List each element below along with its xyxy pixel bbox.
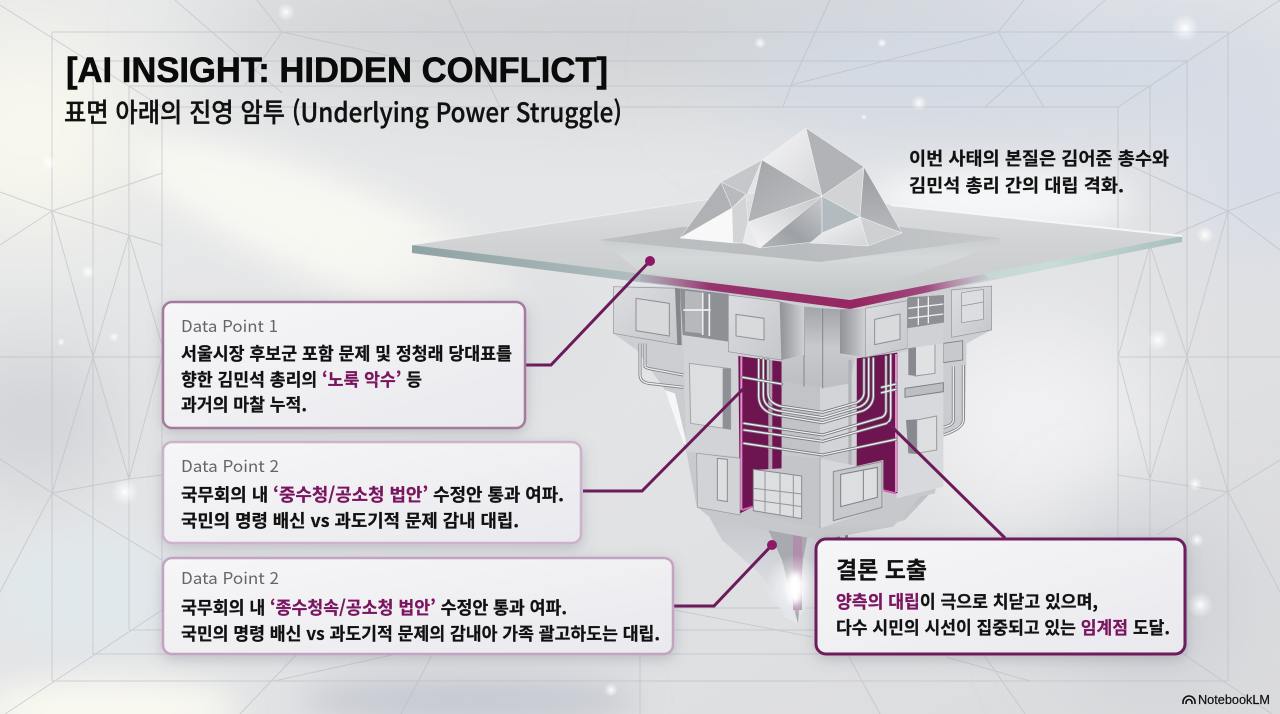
panel: conclusion: 양측의 대립이 극으로 치닫고 있으며, (836, 589, 1098, 614)
panel: data point 2 (second) (163, 558, 673, 654)
upper modules (613, 287, 680, 345)
pipes (743, 355, 896, 455)
subtitle: 표면 아래의 진영 암투 (Underlying Power Struggle) (64, 91, 622, 130)
side pipes right (943, 365, 963, 435)
summary text: 이번 사태의 본질은 김어준 총수와 (909, 145, 1169, 171)
panel: data point 2: 국민의 명령 배신 vs 과도기적 문제 감내 대립. (181, 508, 519, 533)
panel: data point 2: 국무회의 내 ‘중수청/공소청 법안’ 수정안 통과 여파. (181, 482, 564, 507)
illustration: machine under glass with iceberg (412, 128, 1182, 624)
lower modules (697, 453, 740, 515)
connector: conclusion (888, 423, 1005, 538)
magenta cavities (738, 353, 897, 513)
side pipes left (640, 343, 683, 387)
logo: NotebookLM: NotebookLM (1198, 692, 1270, 707)
panel: conclusion (816, 539, 1185, 654)
panel: data point 1: 향한 김민석 총리의 ‘노룩 악수’ 등 (181, 367, 422, 392)
panel: data point 1: 서울시장 후보군 포함 문제 및 정청래 당대표를 (181, 341, 512, 366)
panel: data point 2 (second): Data Point 2 (181, 565, 279, 589)
lower spike (700, 487, 936, 624)
connector: data point 2 (583, 387, 745, 491)
connector: data point 1 (526, 256, 655, 365)
panel: data point 2 (second): 국무회의 내 ‘종수청속/공소청 법안’ 수정안 통과 여파. (181, 595, 567, 620)
panel: conclusion: 다수 시민의 시선이 집중되고 있는 임계점 도달. (836, 615, 1170, 640)
panel: data point 2: Data Point 2 (181, 453, 279, 477)
panel: data point 2 (second): 국민의 명령 배신 vs 과도기적 문제의 감내아 가족 괄고하도는 대립. (181, 621, 660, 646)
panel: data point 1: Data Point 1 (181, 313, 278, 337)
machine body (613, 286, 992, 540)
panel: data point 2 (163, 442, 581, 543)
panel: conclusion: 결론 도출 (836, 551, 927, 585)
glass platform (412, 191, 1182, 309)
connector: data point 3 (674, 540, 777, 606)
title: [AI INSIGHT: HIDDEN CONFLICT] (66, 51, 608, 90)
panel: data point 1: 과거의 마찰 누적. (181, 392, 307, 417)
right tall section (897, 342, 943, 498)
summary text: 김민석 총리 간의 대립 격화. (909, 172, 1124, 198)
faceted crystal (680, 128, 902, 248)
center column (782, 360, 820, 457)
summary text (909, 145, 1169, 198)
panel: data point 1 (163, 302, 525, 428)
left tall section (683, 335, 739, 457)
